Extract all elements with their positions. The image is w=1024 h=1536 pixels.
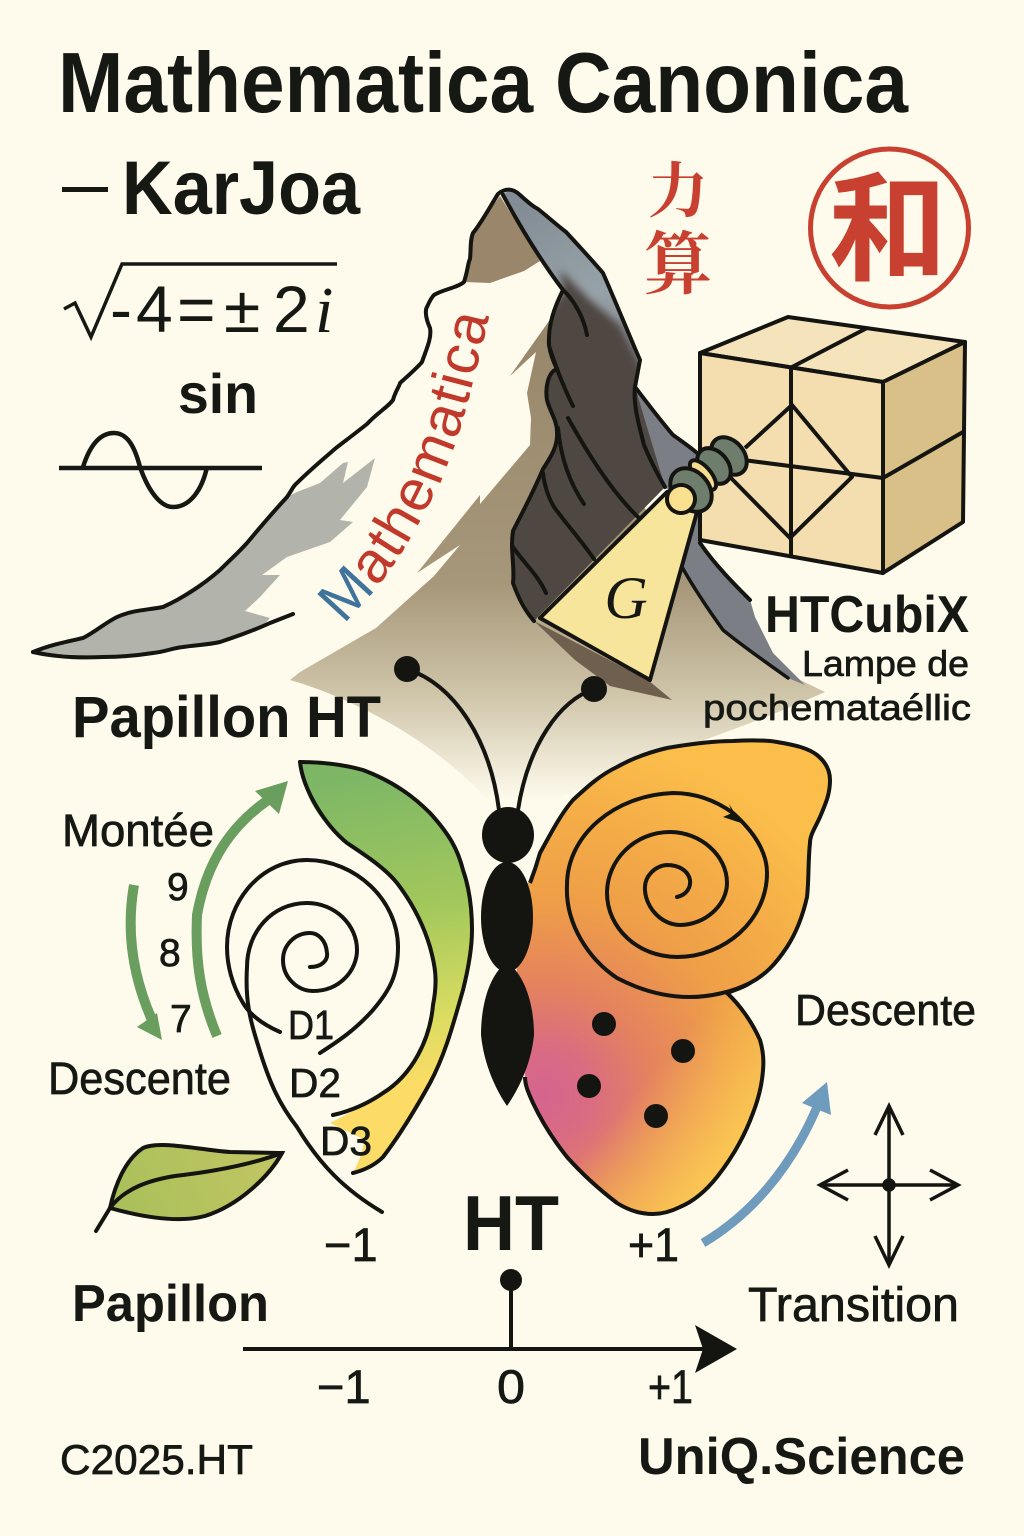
formula: square root: 4 [136,272,173,346]
Descente right label: Descente [795,986,976,1035]
Mathematica curved label: Mathematica [318,316,489,622]
Papillon label: Papillon [72,1275,269,1333]
lamp barrel [661,430,754,520]
mountain: dark rock face [514,269,664,620]
Papillon HT heading: Papillon HT [72,685,381,750]
HT label: HT [463,1179,559,1267]
lamp caption [703,643,971,728]
wing values: +1 [628,1218,679,1271]
title: Mathematica Canonica [58,36,909,131]
antennae [407,669,594,810]
kanji: 力 [648,144,708,230]
numbers 9 8 7: 7 [170,998,192,1041]
wing spots [577,1012,695,1128]
numbers 9 8 7: 8 [159,932,181,975]
footer left: C2025.HT [60,1436,253,1483]
left wing spirals [247,903,382,1212]
descending green arrow [131,885,162,1040]
right lower wing yellow tint [525,993,763,1214]
lamp caption: pochemataéllic [703,687,971,728]
mountain: outlines [33,190,788,678]
Transition label: Transition [748,1279,959,1332]
Montée label: Montée [62,805,214,856]
D labels: D3 [320,1118,372,1164]
mountain: lower shadow under lamp [534,621,672,700]
formula: square root: 2 [273,272,310,346]
compass cross icon [820,1106,958,1265]
mountain: summit cap [464,196,540,283]
axis ticks labels [317,1360,693,1413]
G symbol: G [604,565,648,631]
sine wave icon [59,433,262,507]
wing values: −1 [324,1218,378,1271]
number axis [243,1269,737,1373]
formula: square root: - [110,272,132,346]
formula: square root: = [177,272,216,346]
D labels: D1 [288,1002,334,1048]
D labels [288,1002,372,1164]
subtitle: KarJoa: KarJoa [122,146,361,231]
formula: square root: ± [224,272,260,346]
sin label: sin [178,362,258,425]
lamp caption: Lampe de [802,643,969,684]
mountain: brown base [290,320,825,815]
ascending green arrow [197,781,288,1036]
right wing fill [510,740,830,1214]
right wing outline [525,740,830,1214]
leaf icon [96,1145,282,1231]
light cone [540,492,697,680]
seal: wa: 和 [829,134,947,305]
mountain [33,190,825,815]
HTCubiX label: HTCubiX [765,586,969,644]
spiral arrowhead [723,804,741,823]
left green wing [300,762,472,1173]
lamp with light cone [540,430,754,680]
right wing spiral [567,793,767,997]
formula: square root: i [315,274,333,347]
kanji [644,144,712,308]
mountain: grey snow streak [33,458,375,657]
left wing outline [227,762,472,1212]
blue arrow [703,1082,831,1243]
wing values [324,1218,679,1271]
butterfly [227,656,830,1214]
mountain: blue-grey ridge [501,190,805,685]
numbers 9 8 7: 9 [167,866,189,909]
formula: square root [64,264,337,347]
body [481,807,534,1106]
HTCubiX cube [700,317,965,573]
Descente left label: Descente [48,1053,231,1104]
kanji: 算 [644,211,712,308]
axis ticks labels: +1 [648,1360,693,1413]
D labels: D2 [289,1060,341,1106]
axis ticks labels: −1 [317,1360,371,1413]
footer right: UniQ.Science [638,1428,965,1486]
axis ticks labels: 0 [497,1360,525,1413]
numbers 9 8 7 [159,866,192,1041]
